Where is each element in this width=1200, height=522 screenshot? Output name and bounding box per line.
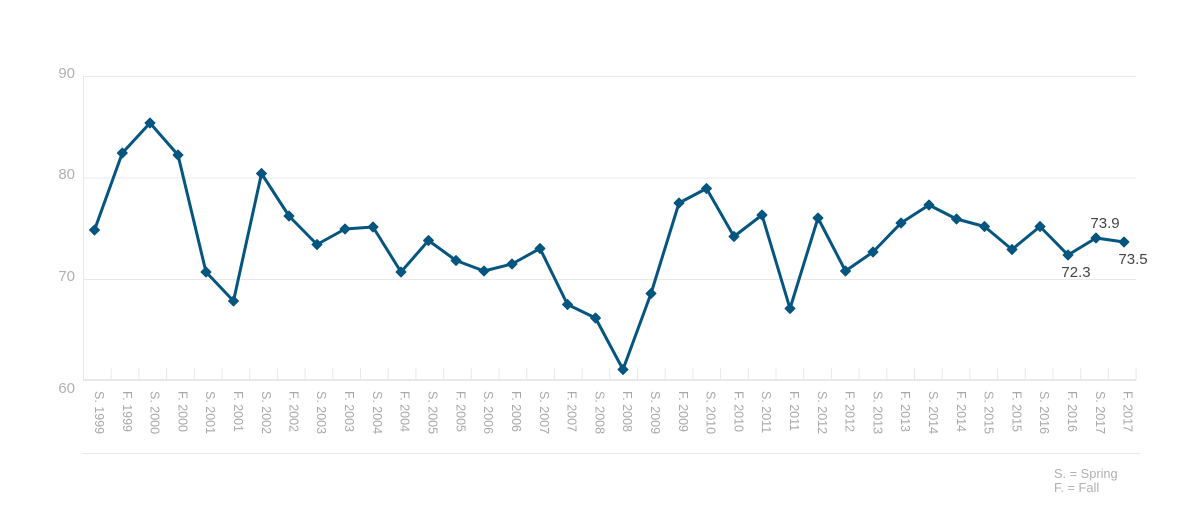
y-axis labels: 90 — [58, 65, 75, 82]
value labels: 72.3 — [1061, 264, 1091, 281]
x-axis labels: S. 2013 — [870, 391, 884, 434]
x-axis labels: S. 2008 — [592, 391, 606, 434]
data line — [94, 123, 1124, 370]
value labels: 73.5 — [1118, 251, 1148, 268]
y-axis labels — [58, 65, 75, 397]
x-axis labels: S. 2017 — [1093, 391, 1107, 434]
x-axis labels: F. 2006 — [509, 391, 523, 432]
x-axis labels: F. 2015 — [1010, 391, 1024, 432]
x-axis labels: S. 2007 — [537, 391, 551, 434]
x-axis labels: F. 2016 — [1065, 391, 1079, 432]
value labels — [1061, 215, 1148, 281]
x-axis labels: F. 2000 — [176, 391, 190, 432]
x-axis labels: S. 2005 — [426, 391, 440, 434]
x-axis labels: S. 2006 — [481, 391, 495, 434]
x-axis labels: F. 1999 — [120, 391, 134, 432]
x-axis labels: F. 2014 — [954, 391, 968, 432]
x-axis labels: F. 2011 — [787, 391, 801, 431]
x-axis labels: S. 2011 — [759, 391, 773, 433]
x-axis labels: S. 1999 — [92, 391, 106, 434]
x-axis labels: S. 2010 — [704, 391, 718, 434]
x-axis labels: F. 2009 — [676, 391, 690, 432]
x-axis labels: F. 2017 — [1120, 391, 1134, 432]
x-axis labels: S. 2003 — [314, 391, 328, 434]
value labels: 73.9 — [1090, 215, 1120, 232]
legend note: F. = Fall — [1054, 480, 1099, 495]
x-axis labels: F. 2012 — [842, 391, 856, 432]
x-axis labels: F. 2007 — [564, 391, 578, 432]
x-axis labels: S. 2015 — [982, 391, 996, 434]
x-axis labels: S. 2000 — [148, 391, 162, 434]
legend note — [1054, 466, 1118, 495]
x-axis labels: S. 2004 — [370, 391, 384, 434]
x-axis labels: S. 2016 — [1037, 391, 1051, 434]
x-axis labels: F. 2005 — [454, 391, 468, 432]
y-axis labels: 70 — [58, 268, 75, 285]
x-axis labels: F. 2004 — [398, 391, 412, 432]
x-axis labels: F. 2003 — [342, 391, 356, 432]
x-axis labels: F. 2008 — [620, 391, 634, 432]
x-axis labels: F. 2002 — [286, 391, 300, 432]
x-axis labels: S. 2012 — [815, 391, 829, 434]
data point markers — [90, 118, 1129, 374]
x-axis labels: S. 2009 — [648, 391, 662, 434]
x-axis labels: S. 2014 — [926, 391, 940, 434]
x-axis labels: S. 2002 — [259, 391, 273, 434]
x-axis labels: F. 2010 — [732, 391, 746, 432]
y-axis labels: 60 — [58, 380, 75, 397]
x-axis labels: F. 2001 — [231, 391, 245, 432]
x-axis labels: S. 2001 — [203, 391, 217, 434]
x-axis labels: F. 2013 — [898, 391, 912, 432]
legend note: S. = Spring — [1054, 466, 1118, 481]
y-axis labels: 80 — [58, 166, 75, 183]
x-axis labels — [92, 391, 1134, 434]
